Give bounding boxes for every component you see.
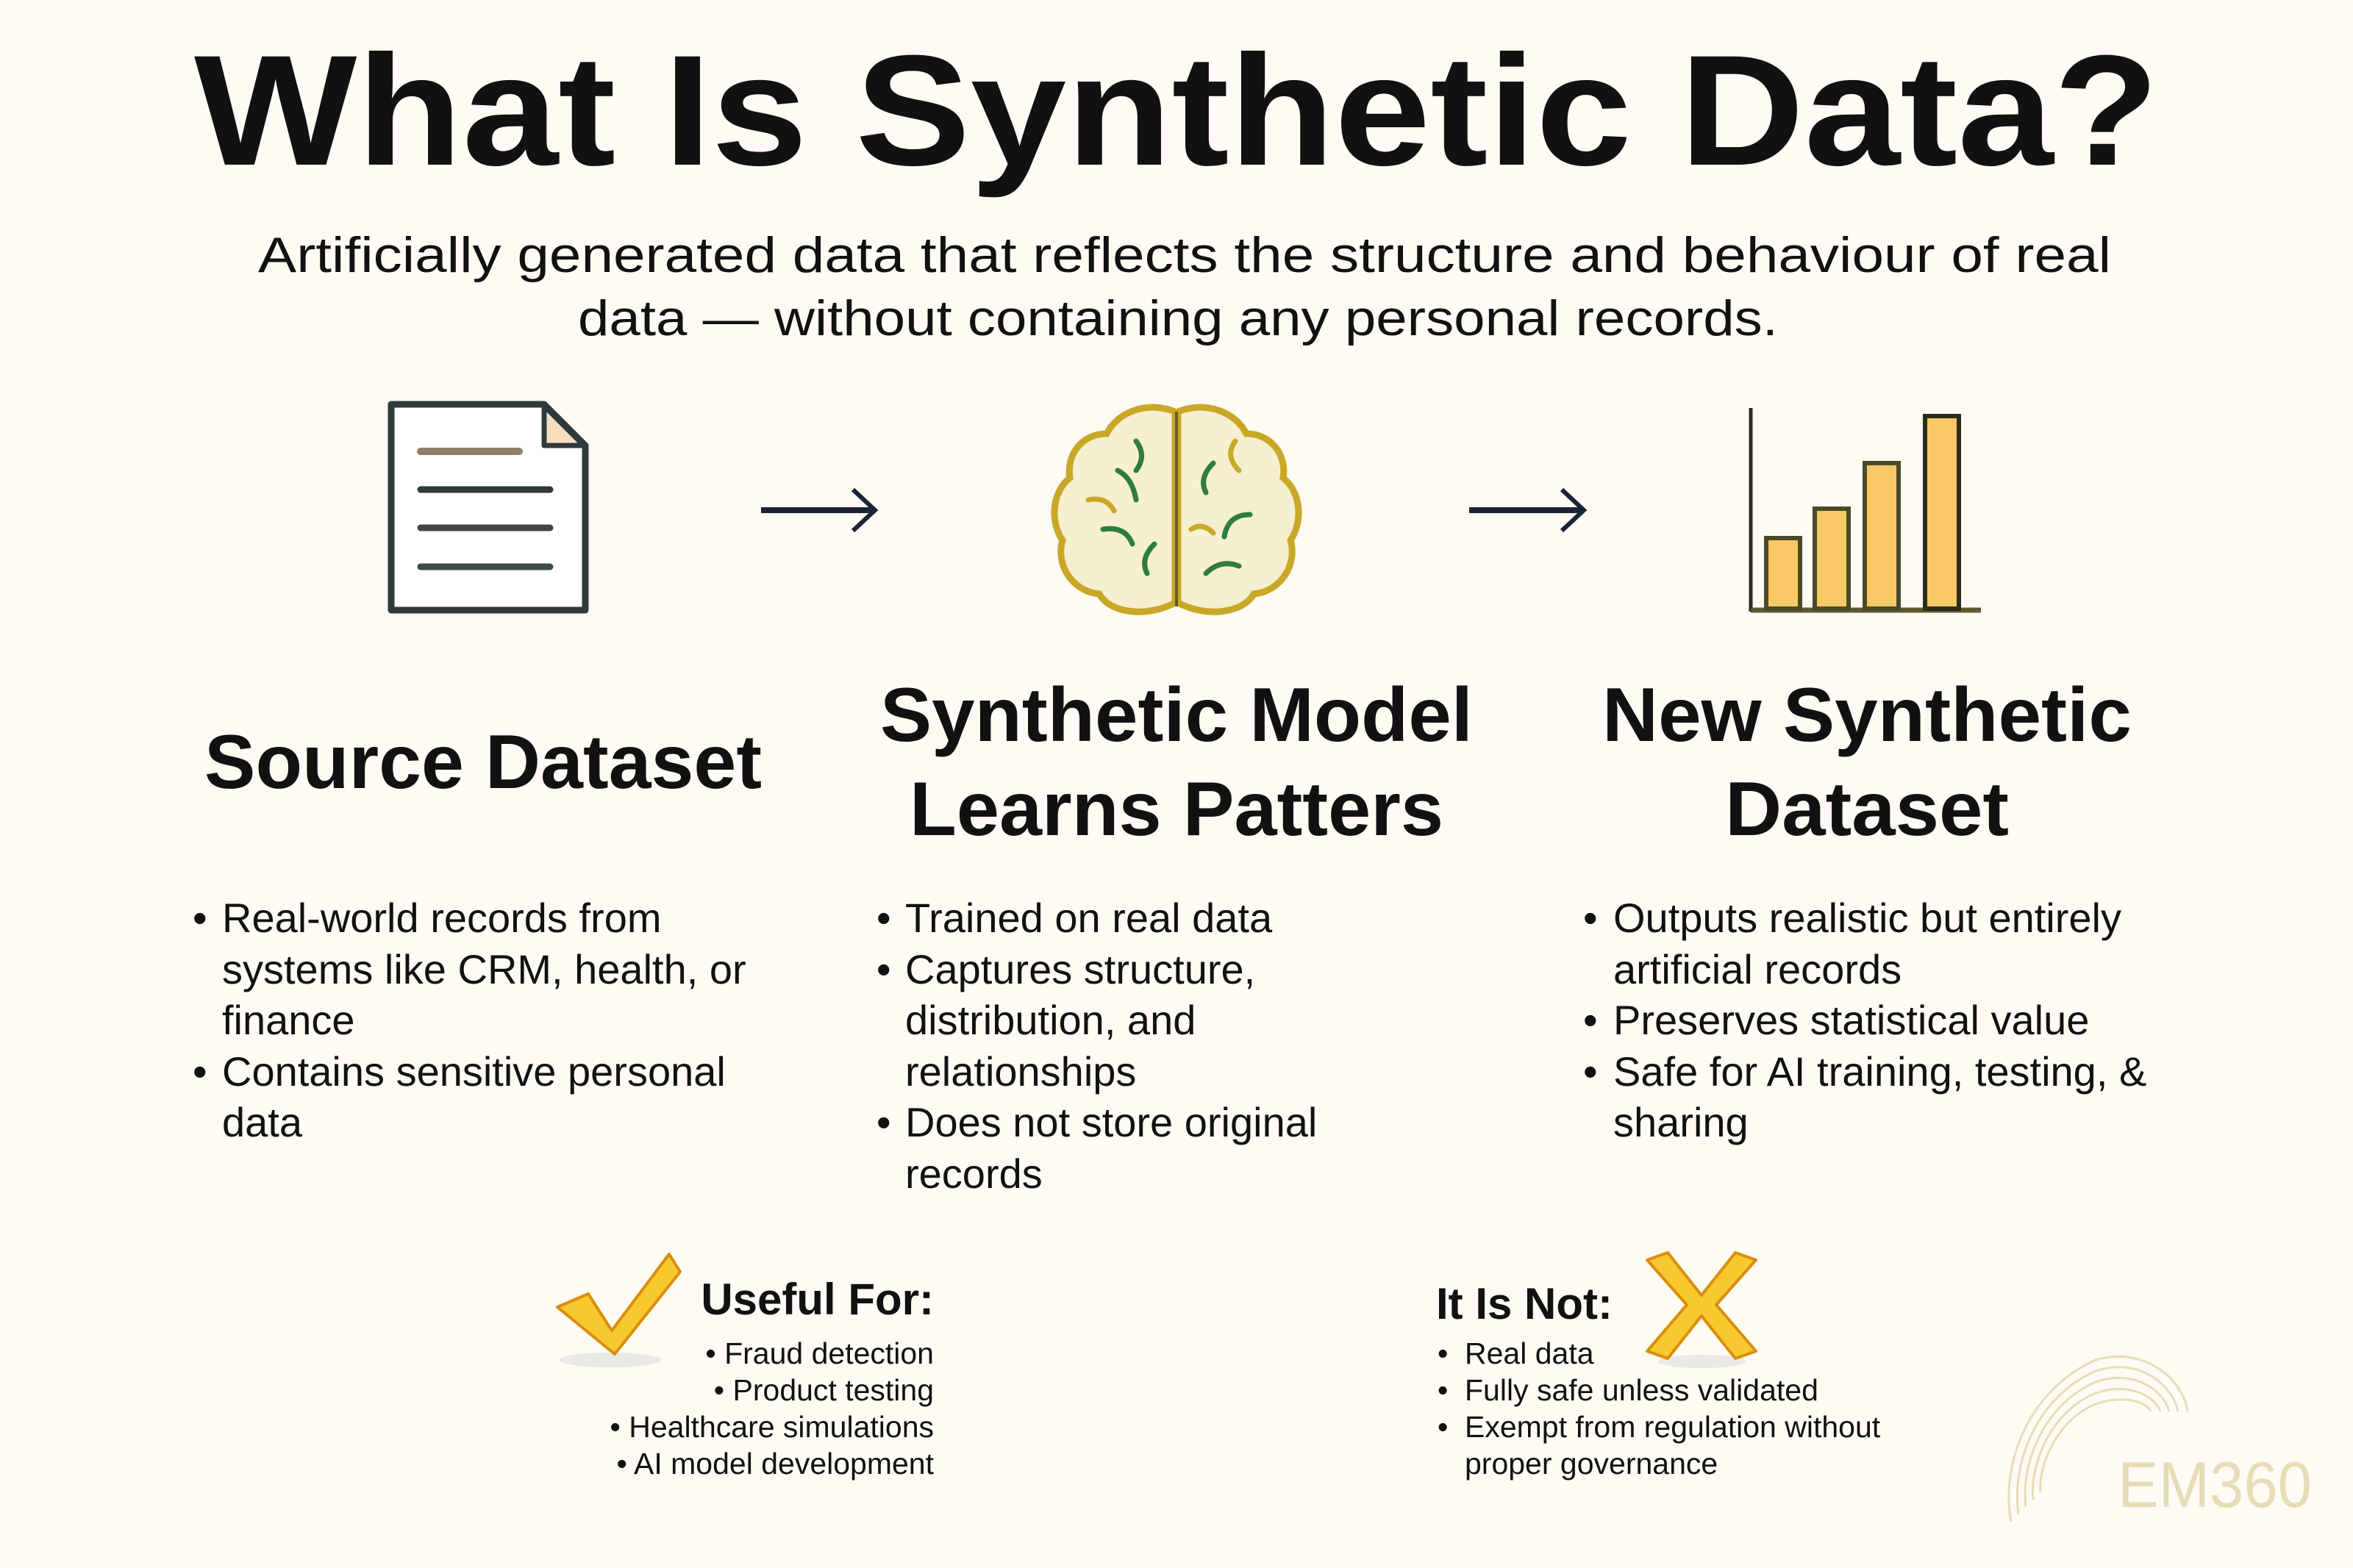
subtitle: data — without containing any personal records.: [578, 290, 1778, 346]
icon: document: [391, 404, 585, 610]
text: output bullets: Preserves statistical value: [1613, 997, 2089, 1043]
icon: brain: [1054, 407, 1299, 612]
text: useful list: • AI model development: [617, 1447, 935, 1481]
text: output bullets: •: [1583, 1048, 1598, 1095]
text: model bullets: records: [905, 1150, 1043, 1197]
text: not list: proper governance: [1465, 1447, 1718, 1481]
text: source bullets: data: [222, 1099, 303, 1145]
heading: synthetic model: [880, 673, 1473, 852]
text: model bullets: [876, 895, 1317, 1197]
text: not list: •: [1438, 1336, 1448, 1370]
text: model bullets: •: [876, 895, 891, 941]
text: not list: Real data: [1465, 1336, 1594, 1370]
heading: it is not: It Is Not:: [1436, 1279, 1613, 1328]
logo: EM360: [2009, 1356, 2312, 1522]
text: source bullets: Real-world records from: [222, 895, 662, 941]
text: output bullets: •: [1583, 997, 1598, 1043]
text: model bullets: Does not store original: [905, 1099, 1317, 1145]
text: useful list: [610, 1336, 935, 1481]
text: output bullets: •: [1583, 895, 1598, 941]
text: source bullets: systems like CRM, health, or: [222, 946, 746, 992]
icon: checkmark: [557, 1254, 680, 1367]
text: not list: •: [1438, 1373, 1448, 1407]
heading: synthetic model: Synthetic Model: [880, 673, 1473, 758]
text: model bullets: distribution, and: [905, 997, 1196, 1043]
text: output bullets: sharing: [1613, 1099, 1749, 1145]
text: model bullets: Trained on real data: [905, 895, 1273, 941]
heading: useful for: Useful For:: [701, 1275, 934, 1324]
text: not list: Fully safe unless validated: [1465, 1373, 1818, 1407]
text: source bullets: [193, 895, 746, 1145]
text: source bullets: •: [193, 1048, 207, 1095]
text: model bullets: Captures structure,: [905, 946, 1255, 992]
text: not list: •: [1438, 1410, 1448, 1444]
heading: new synthetic dataset: [1602, 673, 2132, 852]
logo: EM360: EM360: [2118, 1448, 2312, 1521]
text: not list: Exempt from regulation without: [1465, 1410, 1881, 1444]
text: model bullets: relationships: [905, 1048, 1136, 1095]
icon: cross: [1647, 1253, 1756, 1368]
text: model bullets: •: [876, 946, 891, 992]
text: source bullets: Contains sensitive personal: [222, 1048, 726, 1095]
text: output bullets: artificial records: [1613, 946, 1902, 992]
arrow: 2: [1469, 490, 1584, 531]
text: output bullets: Safe for AI training, testing, &: [1613, 1048, 2146, 1095]
heading: source dataset: Source Dataset: [204, 720, 762, 805]
title: What Is Synthetic Data?: [194, 23, 2159, 198]
icon: bar chart: [1751, 408, 1981, 612]
subtitle: [258, 227, 2111, 346]
text: output bullets: [1583, 895, 2146, 1145]
text: useful list: • Healthcare simulations: [610, 1410, 934, 1444]
text: model bullets: •: [876, 1099, 891, 1145]
heading: synthetic model: Learns Patters: [910, 767, 1443, 852]
heading: new synthetic dataset: Dataset: [1725, 767, 2009, 852]
text: useful list: • Fraud detection: [705, 1336, 934, 1370]
text: useful list: • Product testing: [714, 1373, 934, 1407]
heading: new synthetic dataset: New Synthetic: [1602, 673, 2132, 758]
text: source bullets: •: [193, 895, 207, 941]
text: output bullets: Outputs realistic but entirely: [1613, 895, 2121, 941]
subtitle: Artificially generated data that reflects the structure and behaviour of real: [258, 227, 2111, 283]
text: source bullets: finance: [222, 997, 355, 1043]
arrow: 1: [761, 490, 875, 531]
text: not list: [1438, 1336, 1881, 1481]
